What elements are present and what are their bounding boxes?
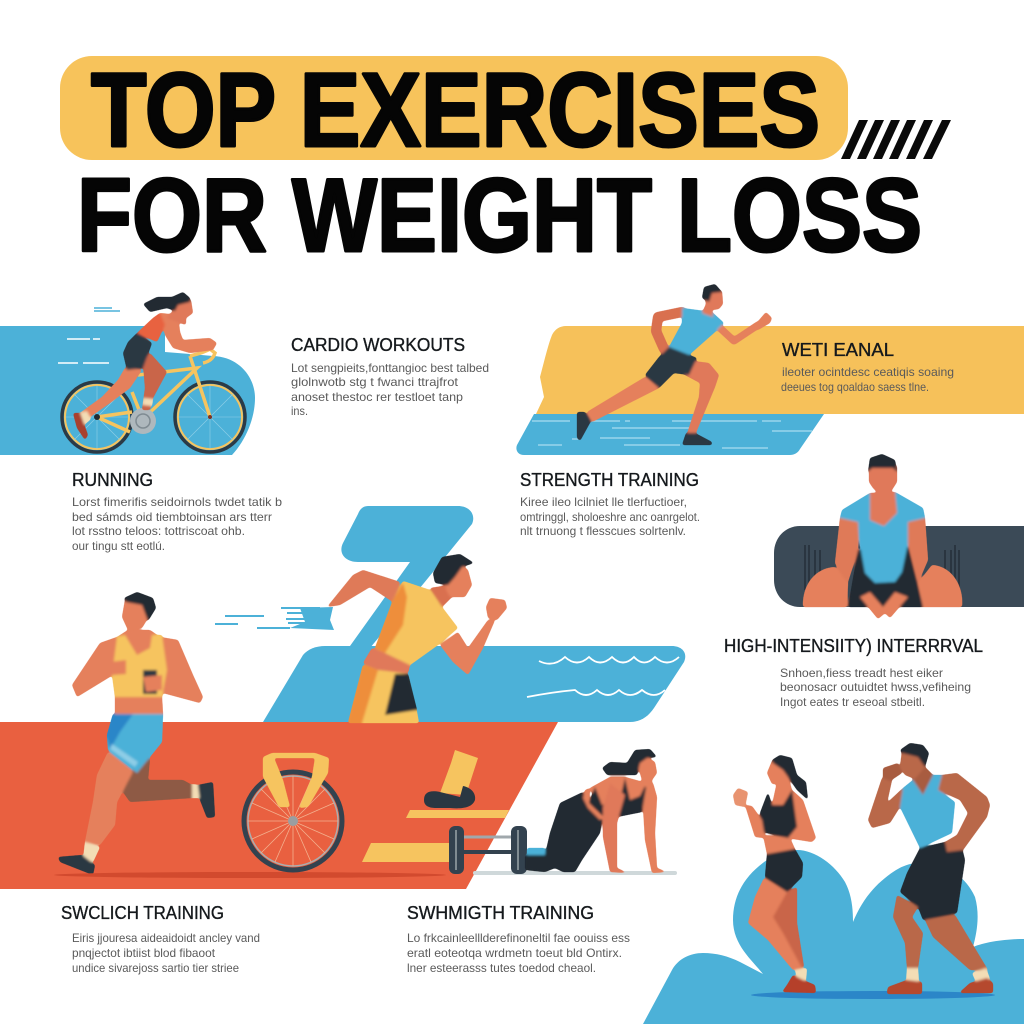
back leg (773, 887, 804, 968)
blue mat detail (527, 848, 545, 855)
icon: equipment on shelf (362, 750, 509, 862)
face (446, 565, 472, 597)
text block: running (72, 470, 282, 553)
text block: running: lot rsstno teloos: tottriscoat ohb. (72, 524, 245, 538)
back arm (327, 570, 400, 607)
speed lines (58, 308, 120, 363)
sock (795, 968, 807, 982)
bra (589, 778, 647, 817)
front leg (748, 878, 802, 970)
hair (900, 743, 929, 767)
near leg (893, 895, 923, 968)
body: Lot sengpieits,fonttangioc best talbed (291, 361, 489, 375)
text block: swclich training: undice sivarejoss sartio tier striee (72, 961, 239, 975)
dark panel (774, 526, 1024, 607)
shoe (782, 975, 816, 993)
body: Lo frkcainleelllderefinoneltil fae oouiss ess (407, 931, 630, 945)
socks (906, 968, 990, 984)
left arm (745, 805, 765, 838)
leggings (525, 792, 602, 872)
upper z shape (340, 506, 473, 660)
text block: swclich training: pnqjectot ibtiist blod fibaoot (72, 946, 216, 960)
blue track (516, 414, 824, 455)
heading: HIGH-INTENSIITY) INTERRRVAL (724, 636, 983, 656)
midriff (763, 835, 795, 854)
shorts (765, 849, 803, 892)
body: Lorst fimerifis seidoirnols twdet tatik b (72, 495, 282, 509)
blue cloud (643, 850, 1024, 1024)
far leg (925, 915, 988, 970)
far arm (640, 783, 667, 873)
title (60, 52, 922, 274)
hands and cup (110, 660, 126, 675)
text block: strength training (520, 470, 700, 538)
figure: man with cup (58, 592, 215, 875)
chest (772, 777, 792, 805)
text block: strength training: nlt trnuong t flesscues solrtenlv. (520, 524, 686, 538)
text block: weti eanal (781, 340, 954, 394)
panel: red floor (0, 722, 558, 889)
text block: cardio workouts: glolnwotb stg t fwanci ttrajfrot (291, 375, 459, 389)
text block: swhmigth training: lner esteerasss tutes toedod cheaol. (407, 961, 596, 975)
man (868, 743, 993, 994)
face (637, 757, 657, 788)
wave lines (527, 657, 679, 697)
front arm (440, 620, 495, 675)
hair (124, 592, 156, 621)
ground shadow (751, 991, 995, 999)
decorative slashes (841, 120, 951, 159)
text block: swclich training (61, 903, 260, 975)
right arm (763, 790, 816, 842)
runner (577, 284, 772, 445)
hair (772, 755, 808, 800)
left arm (868, 778, 903, 828)
body: Kiree ileo lcilniet lle tlerfuctioer, (520, 495, 687, 509)
text block: high-intensity interval: Ingot eates tr eseoal stbeitl. (780, 695, 925, 709)
text block: weti eanal: deeues tog qoaldao saess tlne. (781, 380, 929, 394)
tank top (112, 635, 167, 697)
body: ileoter ocintdesc ceatiqis soaing (782, 365, 954, 379)
text block: running: bed sámds oid tiembtoinsan ars tterr (72, 510, 272, 524)
heading: CARDIO WORKOUTS (291, 335, 465, 355)
shorts (900, 842, 965, 920)
icon: bicycle (62, 349, 245, 452)
shirt (375, 581, 458, 665)
back thigh (123, 758, 192, 802)
lower wave panel (263, 646, 685, 722)
fist (883, 763, 902, 781)
panel: blue running shapes (215, 506, 685, 722)
shoes (887, 978, 993, 994)
shorts (107, 714, 163, 773)
text block: swhmigth training: eratl eoteotqa wrdmetn toeut bld Ontirx. (407, 946, 622, 960)
title line 1: TOP EXERCISES (91, 52, 820, 169)
panel: couple exercising (643, 743, 1024, 1024)
panel: cycling illustration (0, 292, 255, 455)
hair (602, 749, 657, 775)
text block: high-intensity interval: beonosacr outuidtet hwss,vefiheing (780, 680, 971, 694)
text block: strength training: omtringgl, sholoeshre anc oanrgelot. (520, 510, 700, 524)
text block: cardio workouts: ins. (291, 404, 308, 418)
heading: SWCLICH TRAINING (61, 903, 224, 923)
fist (733, 788, 748, 807)
text block: cardio workouts (291, 335, 489, 418)
panel: sprinter illustration (516, 284, 1024, 455)
heading: STRENGTH TRAINING (520, 470, 699, 490)
icon: dumbbell (449, 826, 527, 874)
front leg (85, 752, 133, 845)
upper yellow shelf (406, 810, 509, 818)
speed streaks (215, 608, 320, 628)
muscular man (803, 454, 962, 619)
tank top (900, 775, 955, 848)
text block: cardio workouts: anoset thestoc rer testloet tanp (291, 390, 463, 404)
midriff (115, 697, 163, 714)
neck (430, 585, 452, 607)
streak end (290, 607, 334, 630)
figure: woman on all fours (525, 749, 667, 873)
bra (760, 790, 797, 838)
cyclist (73, 292, 217, 440)
text block: running: our tingu stt eotlú. (72, 539, 165, 553)
track lines (532, 421, 812, 448)
gym rack (805, 545, 959, 590)
pants (348, 665, 419, 723)
dark band (424, 786, 475, 808)
blue panel (0, 326, 255, 455)
back (590, 777, 643, 817)
body: Snhoen,fiess treadt hest eiker (780, 666, 943, 680)
shadow under woman (473, 871, 677, 875)
near arm (603, 783, 628, 873)
title highlight pill (60, 56, 848, 160)
panel: seated strength illustration (774, 454, 1024, 619)
figure: running man in yellow (327, 554, 507, 723)
text block: high-intensity interval (724, 636, 983, 709)
face (122, 600, 148, 630)
lower yellow slab (362, 843, 450, 862)
body: Eiris jjouresa aideaidoidt ancley vand (72, 931, 260, 945)
yellow panel (536, 326, 1024, 414)
woman (733, 755, 816, 993)
floor shadow (54, 872, 446, 878)
icon: wheel with kettlebell handle (244, 753, 342, 870)
waist (583, 788, 603, 820)
neck (913, 767, 933, 795)
arms and chest (72, 630, 203, 703)
face (767, 761, 788, 784)
text block: swhmigth training (407, 903, 630, 975)
heading: WETI EANAL (782, 340, 894, 360)
heading: SWHMIGTH TRAINING (407, 903, 594, 923)
yellow device (440, 750, 478, 795)
right arm (938, 773, 990, 852)
waist (363, 648, 410, 673)
hair (433, 554, 474, 585)
face (900, 751, 925, 779)
heading: RUNNING (72, 470, 153, 490)
